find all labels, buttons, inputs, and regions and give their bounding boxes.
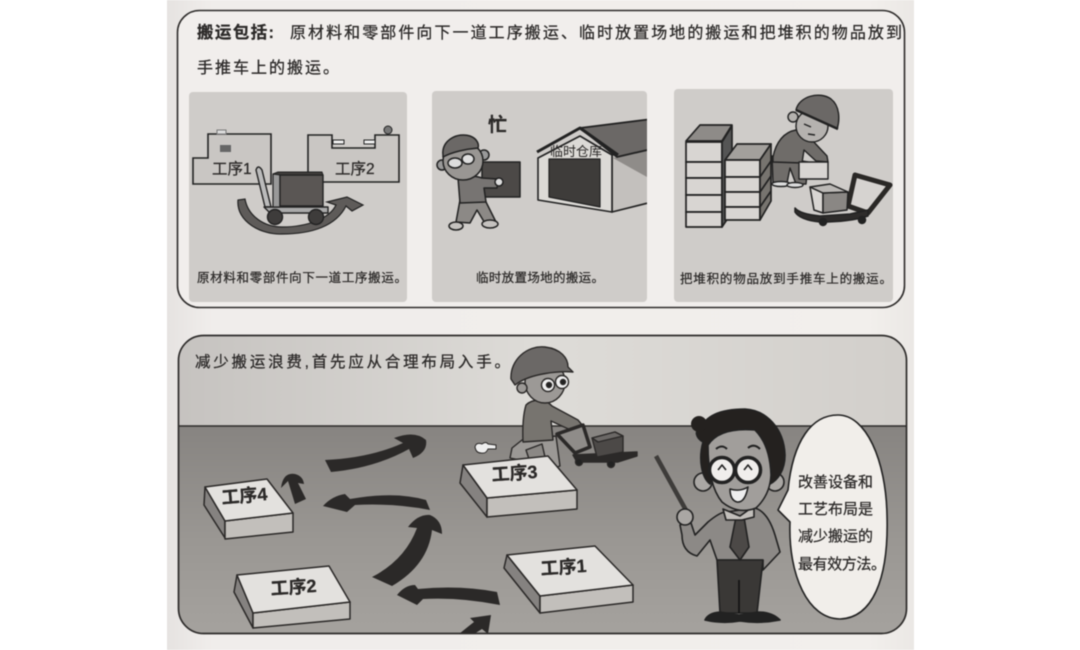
illustration: process 1 building	[193, 130, 271, 184]
block: process 4: 工序4	[221, 483, 268, 508]
panel: what transport includes	[178, 10, 904, 308]
illustration: worker carrying a box	[437, 135, 520, 230]
block: process 2: 工序2	[270, 575, 317, 599]
illustration: temporary warehouse: 临时仓库	[550, 144, 602, 159]
sub-panel: temporary storage	[432, 91, 660, 302]
block: process 3: 工序3	[491, 461, 538, 485]
arrow: process 3 onward	[325, 434, 426, 472]
block: process 2	[234, 566, 350, 628]
illustration: teacher with pointer	[656, 409, 785, 622]
caption: moving to next process: 原材料和零部件向下一道工序搬运。	[197, 270, 407, 285]
block: process 4	[204, 479, 293, 539]
illustration: stacked boxes	[686, 125, 771, 227]
page background	[167, 0, 914, 650]
arrow: toward process 4	[323, 494, 430, 512]
bubble text line 2: 工艺布局是	[798, 501, 873, 518]
panel: reduce transport waste	[178, 336, 906, 634]
speech bubble	[778, 415, 887, 619]
block: process 1: 工序1	[540, 555, 587, 579]
arrow: from process 2 upward	[372, 515, 442, 586]
sub-panel: loading onto cart	[674, 89, 893, 302]
heading: start with layout: 减少搬运浪费,首先应从合理布局入手。	[195, 352, 510, 371]
caption: temporary storage: 临时放置场地的搬运。	[476, 270, 604, 285]
arrow: into process 4	[281, 474, 306, 504]
illustration: worker pushing a cart	[510, 347, 637, 470]
illustration: worker lifting a box	[772, 95, 839, 188]
illustration: process 2 building	[308, 126, 399, 182]
icon: hand cart loaded with box	[795, 175, 890, 226]
block: process 1	[504, 546, 633, 613]
bubble text line 3: 减少搬运的	[798, 528, 873, 545]
heading: transport includes: 搬运包括:	[197, 22, 274, 42]
illustration: process 2 building: 工序2	[335, 160, 375, 178]
text block: intro line two: 手推车上的搬运。	[197, 59, 339, 77]
bubble text line 1: 改善设备和	[798, 474, 873, 491]
icon: dust cloud	[475, 442, 496, 453]
sub-panel: moving to next process	[189, 92, 407, 302]
icon: hand cart with box	[256, 167, 328, 224]
illustration: temporary warehouse	[537, 118, 660, 212]
arrow: curved transport arrow	[238, 197, 363, 234]
floor	[179, 426, 906, 633]
arrow: process 1 to process 2	[397, 585, 500, 605]
arrow: entering process 1	[459, 615, 491, 634]
bubble text line 4: 最有效方法。	[798, 556, 886, 573]
illustration: process 1 building: 工序1	[212, 160, 252, 178]
text block: intro line one: 原材料和零部件向下一道工序搬运、临时放置场地的搬运和把堆积的物品放到	[290, 24, 902, 42]
block: process 3	[460, 456, 577, 517]
caption: loading onto cart: 把堆积的物品放到手推车上的搬运。	[680, 271, 892, 286]
label: busy: 忙	[488, 113, 507, 136]
